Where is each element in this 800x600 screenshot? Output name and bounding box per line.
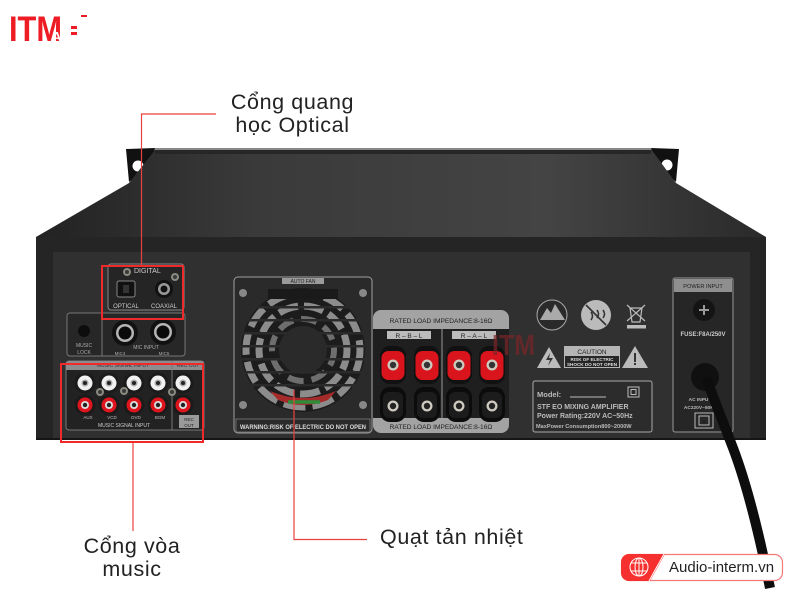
safety icons — [537, 300, 648, 368]
panel: music signal input: DVD — [131, 415, 141, 420]
panel: mic input — [67, 313, 185, 356]
caution label: SHOCK DO NOT OPEN — [567, 362, 618, 367]
panel: digital inputs: OPTICAL — [113, 304, 139, 310]
panel: music signal input: OUT — [184, 423, 194, 428]
panel: speaker terminals: R – B – L — [395, 333, 423, 340]
panel: music signal input: MUSIC SIGNAL INPUT — [97, 363, 149, 369]
leader line: music — [132, 442, 134, 531]
panel: mic input: MUSIC — [76, 343, 92, 349]
panel: power input: AC220V~50Hz — [684, 405, 717, 411]
website badge: Audio-interm.vn — [669, 559, 774, 576]
panel: speaker terminals: RATED LOAD IMPEDANCE:8-16Ω — [390, 424, 492, 431]
panel: music signal input: MUSIC SIGNAL INPUT — [98, 423, 150, 429]
model plate: Power Rating:220V AC~50Hz — [537, 413, 633, 420]
panel: cooling fan: WARNING:RISK OF ELECTRIC DO NOT OPEN — [240, 424, 366, 431]
panel: cooling fan: AUTO FAN — [291, 279, 316, 285]
panel: power input: AC INPUT — [689, 397, 711, 403]
panel: mic input: MIC4 — [115, 351, 126, 356]
label: optical port: học Optical — [235, 113, 350, 137]
power cord — [706, 378, 770, 588]
panel: power input: POWER INPUT — [683, 284, 723, 290]
panel: digital inputs: COAXIAL — [151, 304, 178, 310]
leader line: optical — [142, 114, 216, 266]
callout box: optical port — [102, 266, 183, 319]
panel: mic input: MIC INPUT — [133, 345, 159, 351]
panel: music signal input — [66, 361, 204, 430]
chassis rear face — [36, 237, 766, 440]
logo: ITM: A — [52, 29, 62, 44]
label: music port: music — [102, 557, 162, 581]
chassis lid — [36, 149, 766, 237]
panel: power input: FUSE:F8A/250V — [680, 332, 726, 338]
panel: music signal input: VCD — [107, 415, 117, 420]
caution label: CAUTION — [577, 349, 607, 356]
model plate: Model: — [537, 390, 561, 399]
panel: mic input: MIC5 — [159, 351, 170, 356]
label: optical port: Cổng quang — [231, 90, 354, 114]
model plate: STF EO MIXING AMPLIFIER — [537, 404, 629, 411]
panel: speaker terminals — [373, 310, 509, 433]
leader line: fan — [294, 390, 367, 540]
caution label: RISK OF ELECTRIC — [571, 357, 614, 362]
model plate — [533, 381, 652, 432]
panel: mic input: LOCK — [77, 350, 91, 356]
callout box: music ports — [61, 364, 203, 442]
label: music port: Cổng vòa — [84, 534, 180, 558]
caution label — [564, 346, 620, 368]
rack bracket: left — [126, 148, 155, 182]
panel: speaker terminals: R – A – L — [461, 333, 488, 340]
panel: music signal input: BGM — [155, 415, 165, 420]
panel: power input — [673, 278, 733, 432]
website badge — [621, 554, 782, 581]
panel: digital inputs — [108, 264, 184, 310]
panel: digital inputs: DIGITAL — [134, 268, 161, 275]
amplifier rear view — [36, 148, 770, 588]
logo: ITM: ITM — [9, 10, 62, 49]
model plate: MaxPower Consumption800~2000W — [536, 424, 632, 430]
watermark: ITM: ITM — [492, 330, 535, 362]
panel: music signal input: AUX — [83, 415, 93, 420]
icon: globe — [630, 558, 648, 576]
panel: music signal input: REC — [184, 417, 194, 422]
panel: cooling fan — [234, 277, 372, 433]
rack bracket: right — [651, 148, 679, 182]
panel: music signal input: REC OUT — [177, 363, 199, 369]
panel: speaker terminals: RATED LOAD IMPEDANCE:8-16Ω — [390, 318, 492, 325]
label: cooling fan: Quạt tản nhiệt — [380, 525, 523, 549]
